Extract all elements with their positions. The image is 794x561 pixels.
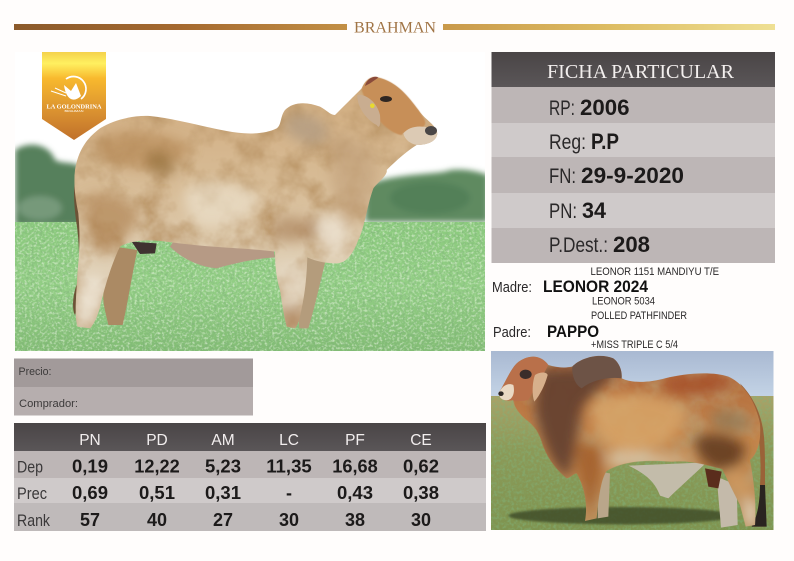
swallow emblem bbox=[51, 76, 86, 100]
row: Rank: 38 bbox=[345, 510, 365, 530]
udder bbox=[132, 242, 157, 254]
row: PN: PN: bbox=[549, 200, 577, 223]
body bbox=[67, 73, 443, 333]
row: Rank: 30 bbox=[279, 510, 299, 530]
pedigree text: madre and padre: LEONOR 1151 MANDIYU T/E bbox=[590, 266, 719, 278]
row: RP: RP: bbox=[549, 97, 575, 120]
row: Prec bbox=[14, 478, 486, 503]
row: Rank: 40 bbox=[147, 510, 167, 530]
grass field bbox=[15, 222, 485, 351]
panel: precio and comprador: Precio: bbox=[18, 366, 52, 378]
ear with tag bbox=[357, 95, 380, 127]
row: Prec: - bbox=[286, 483, 292, 503]
pedigree text: madre and padre: PAPPO bbox=[547, 322, 599, 341]
bull bbox=[495, 352, 767, 528]
head bbox=[498, 357, 548, 401]
shadow bbox=[508, 507, 735, 524]
row: P.Dest bbox=[492, 228, 775, 263]
icon: La Golondrina logo badge bbox=[42, 52, 106, 140]
table header: PD bbox=[146, 432, 168, 449]
tail bbox=[73, 185, 80, 315]
pedigree text: madre and padre: Madre: bbox=[492, 279, 532, 296]
icon: La Golondrina logo badge: BRAHMAN bbox=[64, 109, 84, 113]
row: P.Dest: 208 bbox=[613, 232, 650, 257]
panel: precio and comprador bbox=[14, 358, 253, 416]
row: Rank: 30 bbox=[411, 510, 431, 530]
row: Dep bbox=[14, 451, 486, 478]
row: Rank: 57 bbox=[80, 510, 100, 530]
table header: PF bbox=[345, 432, 365, 449]
pedigree text: madre and padre bbox=[492, 266, 719, 351]
row: PN bbox=[492, 193, 775, 228]
muzzle bbox=[403, 126, 437, 145]
table header: AM bbox=[211, 432, 235, 449]
body bbox=[495, 352, 765, 528]
row: P.Dest: P.Dest.: bbox=[549, 234, 608, 257]
poll bbox=[365, 77, 378, 86]
row: RP: 2006 bbox=[580, 95, 630, 120]
row: Prec: Prec bbox=[17, 484, 47, 503]
row: Dep: 0,19 bbox=[72, 456, 108, 476]
row: Dep: 5,23 bbox=[205, 456, 241, 476]
header: breed title with rules bbox=[14, 20, 775, 36]
row: Prec: 0,51 bbox=[139, 483, 175, 503]
far legs bbox=[103, 247, 326, 328]
table header: LC bbox=[279, 432, 299, 449]
row: Prec: 0,38 bbox=[403, 483, 439, 503]
background trees bbox=[15, 145, 488, 226]
table header: CE bbox=[410, 432, 432, 449]
eye bbox=[380, 96, 392, 102]
icon: La Golondrina logo badge: LA GOLONDRINA bbox=[46, 104, 102, 110]
icon: cow (cream brahman female) bbox=[67, 73, 443, 333]
row: Prec: 0,69 bbox=[72, 483, 108, 503]
row: Reg: Reg: bbox=[549, 131, 586, 154]
head bbox=[362, 77, 425, 135]
row: Dep: 11,35 bbox=[266, 456, 312, 476]
panel: genetic values table bbox=[14, 423, 486, 531]
row: Reg: P.P bbox=[591, 129, 619, 154]
table header: PN bbox=[79, 432, 101, 449]
coat shading bbox=[535, 365, 615, 478]
row: RP bbox=[492, 87, 775, 123]
panel: main photo of cow in field bbox=[15, 52, 488, 351]
row: Prec: 0,31 bbox=[205, 483, 241, 503]
pedigree text: madre and padre: +MISS TRIPLE C 5/4 bbox=[591, 339, 678, 351]
eye bbox=[520, 370, 532, 379]
row: Dep: 16,68 bbox=[332, 456, 378, 476]
pedigree text: madre and padre: POLLED PATHFINDER bbox=[591, 310, 687, 322]
panel: ficha particular bbox=[492, 52, 775, 263]
far legs bbox=[598, 472, 610, 518]
row: Prec: 0,43 bbox=[337, 483, 373, 503]
row: Rank: 27 bbox=[213, 510, 233, 530]
row: PN: 34 bbox=[582, 198, 607, 223]
hide shading patches bbox=[96, 131, 193, 169]
tail bbox=[740, 383, 767, 527]
panel: sire photo, red brahman bull bbox=[491, 351, 774, 530]
row: Rank bbox=[14, 503, 486, 531]
row: Rank: Rank bbox=[17, 511, 50, 530]
pedigree text: madre and padre: LEONOR 2024 bbox=[543, 277, 648, 296]
pedigree text: madre and padre: LEONOR 5034 bbox=[592, 296, 655, 308]
panel: precio and comprador: Comprador: bbox=[19, 398, 78, 410]
row: Dep: 12,22 bbox=[134, 456, 180, 476]
heading: FICHA PARTICULAR bbox=[547, 61, 735, 83]
row: FN: FN: bbox=[549, 165, 576, 188]
row: Reg bbox=[492, 123, 775, 157]
row: FN bbox=[492, 157, 775, 193]
row: Dep: 0,62 bbox=[403, 456, 439, 476]
table header bbox=[14, 423, 486, 451]
header: breed title with rules: BRAHMAN bbox=[354, 20, 436, 36]
hump bbox=[572, 356, 622, 388]
row: Dep: Dep bbox=[17, 458, 43, 476]
pedigree text: madre and padre: Padre: bbox=[493, 324, 531, 341]
muzzle bbox=[499, 384, 514, 400]
ear bbox=[533, 372, 548, 402]
heading bbox=[492, 52, 775, 87]
row: FN: 29-9-2020 bbox=[581, 163, 684, 188]
sheath bbox=[628, 462, 707, 498]
